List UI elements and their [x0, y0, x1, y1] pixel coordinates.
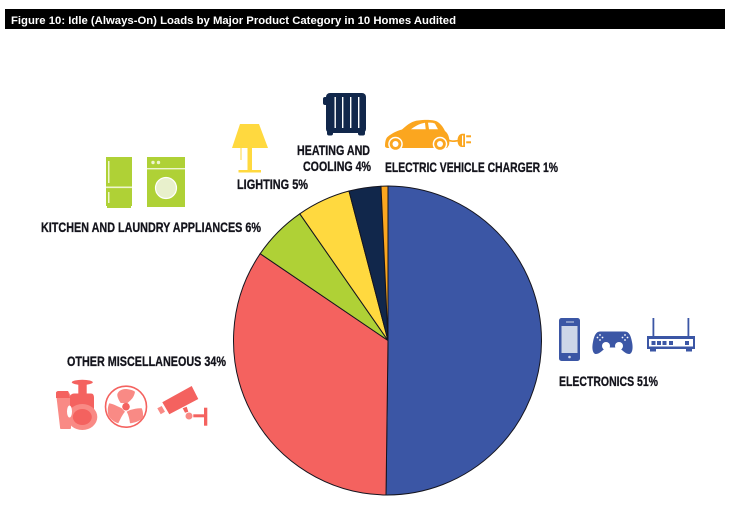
label: heating and cooling: COOLING 4%: [303, 159, 371, 174]
label: heating and cooling: HEATING AND: [297, 143, 370, 158]
icon: pump: [56, 380, 97, 430]
label: lighting: LIGHTING 5%: [237, 177, 308, 192]
icon: lamp: [232, 124, 268, 172]
slice: heating and cooling 4%: [349, 186, 388, 340]
icon: router: [647, 318, 695, 352]
icon: radiator: [323, 93, 366, 136]
slice: other miscellaneous 34%: [234, 254, 388, 495]
label: heating and cooling: [297, 143, 371, 174]
label: other misc: OTHER MISCELLANEOUS 34%: [67, 354, 226, 369]
slice: electronics 51%: [386, 186, 542, 495]
title bar: Figure 10: Idle (Always-On) Loads by Major Product Category in 10 Homes Audited: [11, 15, 456, 27]
icon: gamepad: [592, 332, 633, 354]
icon: washing machine: [147, 157, 185, 207]
icon: phone: [559, 318, 580, 361]
label: electronics: ELECTRONICS 51%: [559, 374, 658, 389]
icon: fan: [106, 386, 146, 427]
slice: EV charger 1%: [381, 186, 388, 340]
icon: electric car: [385, 120, 471, 151]
label: EV charger: ELECTRIC VEHICLE CHARGER 1%: [385, 160, 558, 175]
icon: fridge: [106, 157, 132, 208]
pie chart: [234, 186, 542, 495]
icon: security camera: [157, 386, 207, 426]
slice: kitchen and laundry 6%: [260, 214, 388, 340]
label: kitchen: KITCHEN AND LAUNDRY APPLIANCES 6%: [41, 220, 261, 235]
slice: lighting 5%: [300, 191, 388, 340]
title bar: [5, 9, 725, 29]
